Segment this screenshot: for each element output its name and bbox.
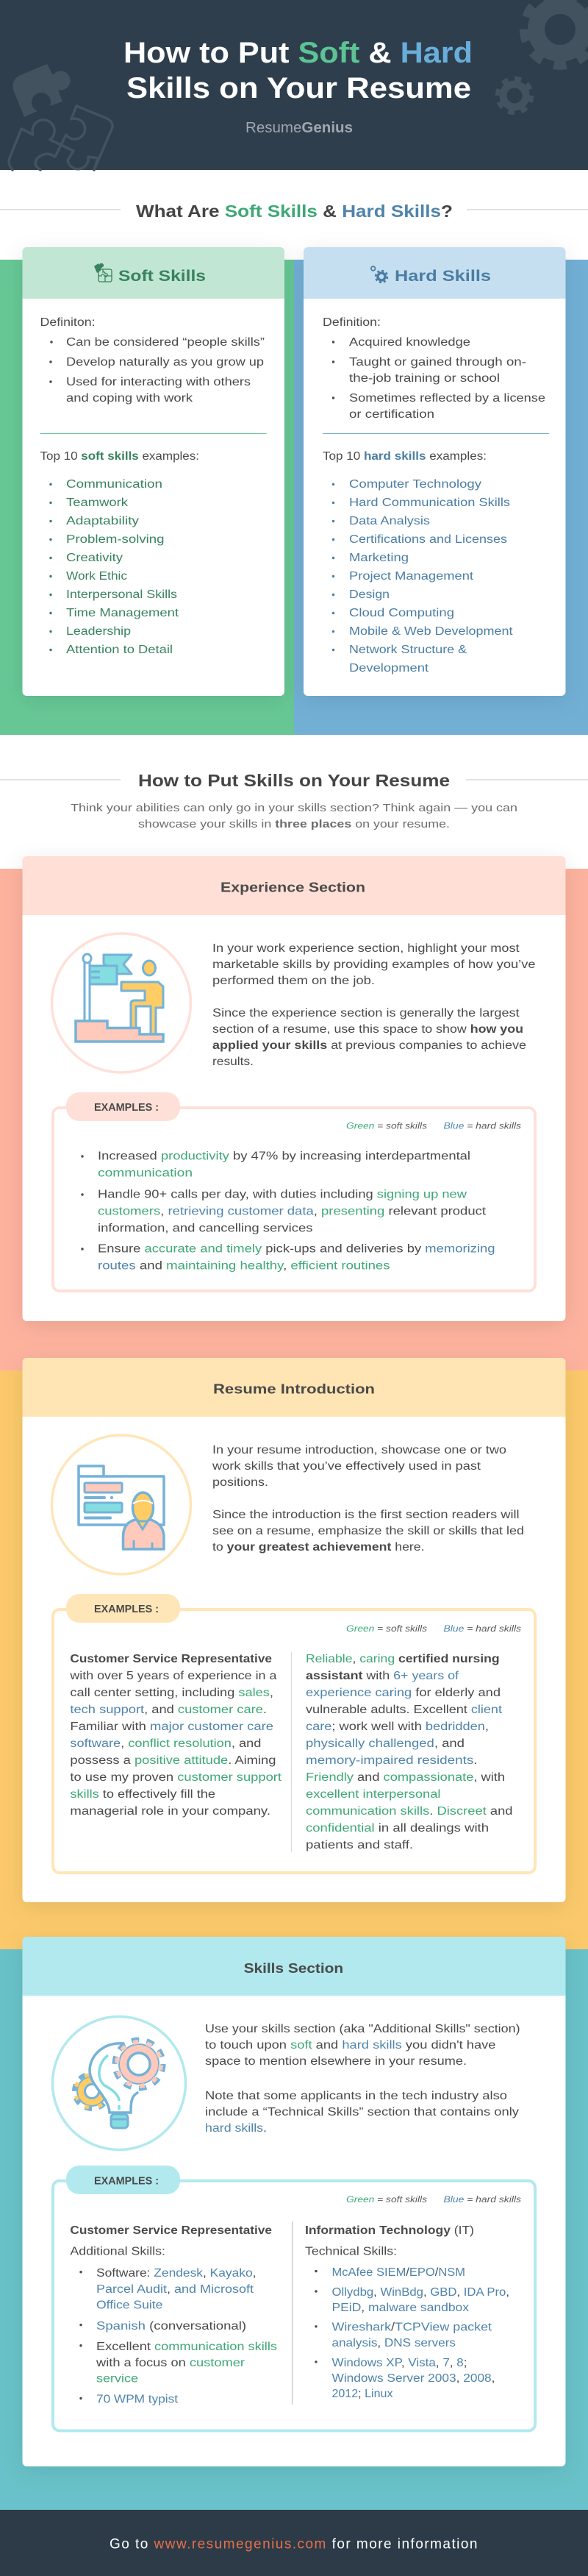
top 10 soft skills list: Attention to Detail xyxy=(66,644,173,656)
description text: space to mention elsewhere in your resume. xyxy=(205,2055,467,2068)
example: certified nursing assistant xyxy=(306,1653,513,1851)
example: technical skills: 2012; Linux xyxy=(332,2388,393,2400)
example: customer service representative: tech support , and customer care . xyxy=(70,1704,267,1716)
background: experience band xyxy=(0,869,588,1370)
icon: outlined puzzle decoration xyxy=(9,106,112,170)
example: additional skills xyxy=(70,2224,277,2406)
description text: work skills that you’ve effectively used in past xyxy=(212,1460,481,1473)
top 10 soft skills list: Creativity xyxy=(66,552,123,564)
legend xyxy=(346,2194,521,2205)
heading: what are soft and hard skills: What Are Soft Skills & Hard Skills ? xyxy=(136,202,453,221)
background: skills band xyxy=(0,1949,588,2510)
examples box xyxy=(53,1092,535,1291)
panel: skills section xyxy=(22,1937,566,2466)
example: technical skills xyxy=(305,2224,509,2400)
definition text: Acquired knowledge xyxy=(349,336,470,349)
example: technical skills: PEiD , malware sandbox xyxy=(332,2302,469,2314)
description text: results. xyxy=(212,1056,254,1068)
top 10 soft skills list: Top 10 soft skills examples: xyxy=(40,450,199,463)
logo: ResumeGenius: ResumeGenius xyxy=(245,120,353,136)
top 10 hard skills list xyxy=(323,450,513,675)
definition text: the-job training or school xyxy=(349,372,500,385)
icon: puzzle xyxy=(94,263,112,282)
example: technical skills: Information Technology (IT) xyxy=(305,2224,474,2237)
definition text xyxy=(323,316,545,421)
example: certified nursing assistant: physically challenged , and xyxy=(306,1737,465,1750)
panel: soft skills xyxy=(22,247,284,696)
example bullets: information, and cancelling services xyxy=(98,1223,313,1235)
top 10 hard skills list: Top 10 hard skills examples: xyxy=(323,450,487,463)
icon: solid puzzle piece decoration xyxy=(12,64,71,117)
intro text xyxy=(71,802,517,830)
description text xyxy=(205,2023,520,2135)
legend xyxy=(346,1121,521,1131)
example: additional skills: Software: Zendesk , Kayako , xyxy=(96,2267,256,2280)
example: customer service representative: Familiar with major customer care xyxy=(70,1721,273,1733)
top 10 soft skills list: Adaptability xyxy=(66,515,139,527)
example: customer service representative: managerial role in your company. xyxy=(70,1805,270,1818)
example: additional skills: Excellent communication skills xyxy=(96,2341,277,2353)
top 10 hard skills list: Project Management xyxy=(349,570,474,583)
definition text: Definition: xyxy=(323,316,381,329)
icon: person with flag on steps xyxy=(51,933,191,1072)
description text: Since the introduction is the first section readers will xyxy=(212,1509,520,1521)
description text: to your greatest achievement here. xyxy=(212,1541,424,1554)
panel: resume introduction xyxy=(22,1358,566,1902)
top 10 soft skills list: Leadership xyxy=(66,625,131,638)
description text xyxy=(212,1444,524,1554)
example bullets: Handle 90+ calls per day, with duties including signing up new xyxy=(98,1189,467,1201)
examples tab xyxy=(66,1594,180,1623)
example: additional skills: Parcel Audit , and Microsoft xyxy=(96,2283,254,2296)
description text: applied your skills at previous companies to achieve xyxy=(212,1039,526,1052)
icon: small gear decoration xyxy=(498,79,531,113)
title: Skills on Your Resume xyxy=(126,72,471,104)
example: certified nursing assistant: Reliable , caring certified nursing xyxy=(306,1653,500,1665)
title: How to Put Soft & Hard xyxy=(123,37,473,69)
example: additional skills: Additional Skills: xyxy=(70,2246,165,2258)
definition text xyxy=(40,316,265,405)
example: certified nursing assistant: patients and staff. xyxy=(306,1839,413,1851)
example: certified nursing assistant: assistant with 6+ years of xyxy=(306,1670,459,1682)
example: technical skills: Ollydbg , WinBdg , GBD, IDA Pro , xyxy=(332,2286,509,2299)
background: soft skills band xyxy=(0,260,294,735)
example: additional skills: 70 WPM typist xyxy=(96,2394,179,2406)
definition text: Definiton: xyxy=(40,316,96,329)
example bullets: Ensure accurate and timely pick-ups and deliveries by memorizing xyxy=(98,1243,495,1256)
top 10 hard skills list: Data Analysis xyxy=(349,515,430,527)
header banner xyxy=(0,0,588,170)
examples tab xyxy=(66,1092,180,1121)
legend: Green = soft skills xyxy=(346,1121,427,1131)
icon: light bulb with gears xyxy=(53,2017,185,2149)
legend: Blue = hard skills xyxy=(444,2194,521,2205)
legend xyxy=(346,1623,521,1634)
background: introduction band xyxy=(0,1370,588,1949)
description text: marketable skills by providing examples of how you’ve xyxy=(212,958,536,971)
example: certified nursing assistant: excellent interpersonal xyxy=(306,1788,441,1801)
description text: hard skills . xyxy=(205,2122,267,2135)
icon: large gear decoration xyxy=(524,0,588,65)
icon: gears xyxy=(371,266,387,282)
intro text: Think your abilities can only go in your skills section? Think again — you can xyxy=(71,802,517,814)
legend: Green = soft skills xyxy=(346,2194,427,2205)
examples tab: EXAMPLES : xyxy=(94,1101,159,1114)
top 10 soft skills list: Communication xyxy=(66,478,162,491)
example: certified nursing assistant: vulnerable adults. Excellent client xyxy=(306,1704,503,1716)
examples box xyxy=(53,1594,535,1873)
top 10 hard skills list: Development xyxy=(349,662,429,675)
example: technical skills: analysis , DNS servers xyxy=(332,2337,456,2349)
top 10 soft skills list: Problem-solving xyxy=(66,533,165,546)
top 10 hard skills list: Computer Technology xyxy=(349,478,481,491)
definition text: Used for interacting with others xyxy=(66,376,251,388)
description text: In your resume introduction, showcase one or two xyxy=(212,1444,506,1456)
top 10 hard skills list: Design xyxy=(349,588,390,601)
description text: Note that some applicants in the tech industry also xyxy=(205,2090,507,2102)
definition text: Develop naturally as you grow up xyxy=(66,356,264,369)
footer: Go to www.resumegenius.com for more information xyxy=(110,2536,478,2552)
example: technical skills: Technical Skills: xyxy=(305,2246,397,2258)
description text: performed them on the job. xyxy=(212,975,375,987)
description text: section of a resume, use this space to show how you xyxy=(212,1023,523,1036)
examples tab: EXAMPLES : xyxy=(94,2174,159,2187)
definition text: Taught or gained through on- xyxy=(349,356,526,369)
example: customer service representative: software , conflict resolution , and xyxy=(70,1737,261,1750)
heading: hard skills: Hard Skills xyxy=(395,267,491,285)
example: customer service representative: call center setting, including sales , xyxy=(70,1687,273,1699)
top 10 soft skills list: Work Ethic xyxy=(66,570,127,583)
top 10 hard skills list: Marketing xyxy=(349,552,409,564)
description text: see on a resume, emphasize the skill or skills that led xyxy=(212,1525,524,1537)
example: additional skills: with a focus on customer xyxy=(96,2357,245,2369)
panel: hard skills xyxy=(304,247,566,696)
example: certified nursing assistant: memory-impaired residents . xyxy=(306,1754,478,1767)
definition text: Sometimes reflected by a license xyxy=(349,392,545,405)
examples tab xyxy=(66,2166,180,2194)
example bullets: Increased productivity by 47% by increasing interdepartmental xyxy=(98,1150,470,1163)
examples box xyxy=(53,2166,535,2430)
small gear xyxy=(74,2074,110,2109)
example: additional skills: Customer Service Representative xyxy=(70,2224,272,2237)
description text xyxy=(212,942,536,1068)
heading: skills section: Skills Section xyxy=(244,1960,343,1976)
example bullets xyxy=(81,1150,495,1273)
example: certified nursing assistant: experience caring for elderly and xyxy=(306,1687,501,1699)
example: certified nursing assistant: confidential in all dealings with xyxy=(306,1822,489,1835)
legend: Green = soft skills xyxy=(346,1623,427,1634)
top 10 hard skills list: Network Structure & xyxy=(349,644,467,656)
footer xyxy=(0,2510,588,2576)
icon: resume folder with person xyxy=(51,1435,191,1574)
example: additional skills: Office Suite xyxy=(96,2299,162,2312)
top 10 soft skills list: Interpersonal Skills xyxy=(66,588,177,601)
example: customer service representative: skills to effectively fill the xyxy=(70,1788,215,1801)
example: certified nursing assistant: care ; work well with bedridden , xyxy=(306,1721,489,1733)
heading: how to put skills on your resume: How to Put Skills on Your Resume xyxy=(138,771,450,790)
examples tab: EXAMPLES : xyxy=(94,1603,159,1615)
example: technical skills: Windows Server 2003 , 2008 , xyxy=(332,2372,495,2385)
description text: to touch upon soft and hard skills you didn't have xyxy=(205,2039,495,2052)
example: customer service representative: to use my proven customer support xyxy=(70,1771,282,1784)
heading: resume introduction: Resume Introduction xyxy=(213,1381,375,1397)
background: hard skills band xyxy=(294,260,588,735)
definition text: Can be considered “people skills” xyxy=(66,336,265,349)
heading: experience section: Experience Section xyxy=(220,880,365,895)
example: technical skills: Windows XP , Vista, 7, 8; xyxy=(332,2357,467,2369)
example: additional skills: Spanish (conversational) xyxy=(96,2320,246,2333)
top 10 soft skills list: Teamwork xyxy=(66,497,128,509)
top 10 soft skills list: Time Management xyxy=(66,607,179,619)
legend: Blue = hard skills xyxy=(444,1121,521,1131)
top 10 hard skills list: Certifications and Licenses xyxy=(349,533,507,546)
heading: soft skills: Soft Skills xyxy=(118,267,206,285)
title xyxy=(123,37,473,104)
description text: In your work experience section, highlight your most xyxy=(212,942,520,955)
top 10 hard skills list: Cloud Computing xyxy=(349,607,454,619)
big gear xyxy=(115,2040,163,2088)
example: additional skills: service xyxy=(96,2373,138,2385)
panel: experience section xyxy=(22,856,566,1321)
example: customer service representative xyxy=(69,1653,282,1818)
example: customer service representative: Customer Service Representative xyxy=(70,1653,272,1665)
example: customer service representative: possess a positive attitude . Aiming xyxy=(70,1754,276,1767)
top 10 hard skills list: Hard Communication Skills xyxy=(349,497,510,509)
top 10 soft skills list xyxy=(40,450,199,656)
definition text: and coping with work xyxy=(66,392,193,405)
legend: Blue = hard skills xyxy=(444,1623,521,1634)
example bullets: communication xyxy=(98,1167,193,1180)
description text: include a “Technical Skills” section that contains only xyxy=(205,2106,519,2118)
description text: Use your skills section (aka "Additional Skills" section) xyxy=(205,2023,520,2035)
description text: positions. xyxy=(212,1476,268,1489)
example bullets: routes and maintaining healthy , efficient routines xyxy=(98,1260,390,1273)
example: technical skills: McAfee SIEM /EPO/NSM xyxy=(332,2266,465,2279)
example: certified nursing assistant: communication skills . Discreet and xyxy=(306,1805,513,1818)
example bullets: customers , retrieving customer data , presenting relevant product xyxy=(98,1206,487,1218)
example: technical skills: Wireshark /TCPView packet xyxy=(332,2321,492,2334)
intro text: showcase your skills in three places on your resume. xyxy=(138,818,450,830)
top 10 hard skills list: Mobile & Web Development xyxy=(349,625,513,638)
definition text: or certification xyxy=(349,408,434,421)
example: customer service representative: with over 5 years of experience in a xyxy=(69,1670,277,1682)
example: certified nursing assistant: Friendly and compassionate , with xyxy=(306,1771,505,1784)
description text: Since the experience section is generally the largest xyxy=(212,1007,520,1020)
